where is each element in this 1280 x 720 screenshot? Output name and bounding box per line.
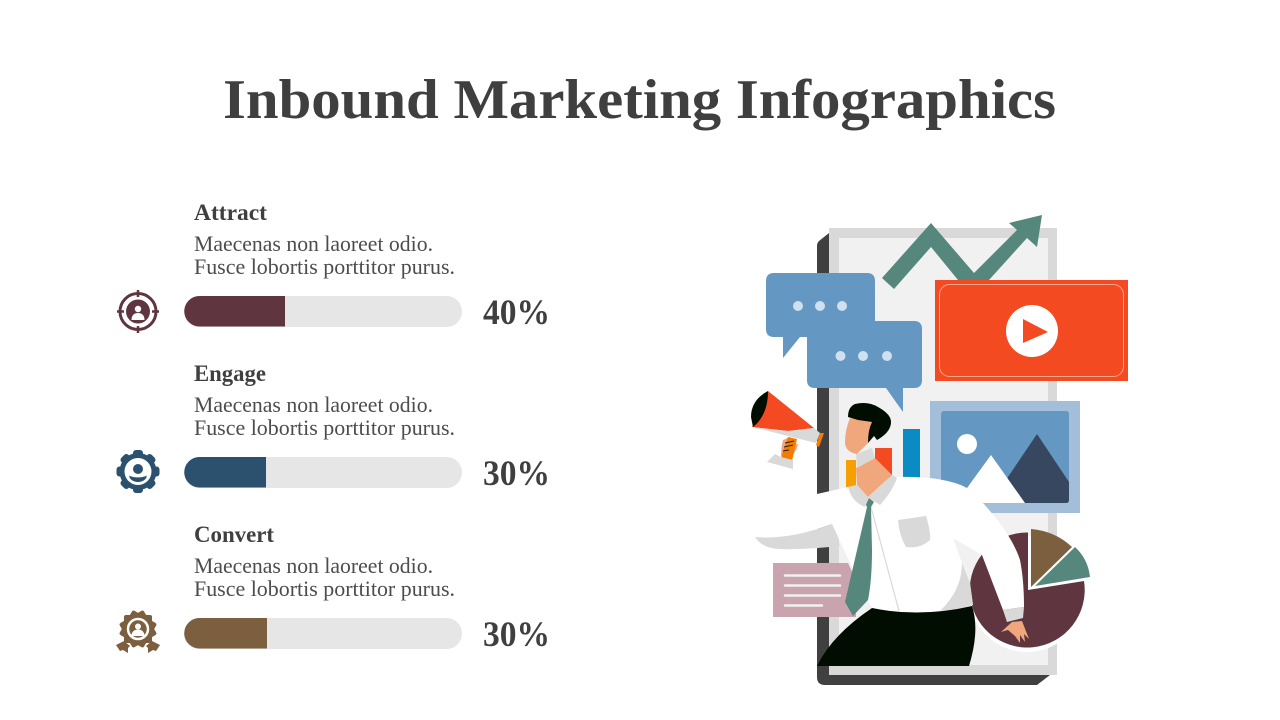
bar chart: [846, 429, 920, 488]
text block: engage: [194, 392, 455, 440]
panel: engage: [116, 361, 550, 493]
video card: [935, 280, 1128, 381]
text block: convert: Maecenas non laoreet odio.: [194, 553, 433, 578]
heading: convert: Convert: [194, 522, 274, 547]
person: [755, 403, 1029, 666]
hand: [1001, 621, 1029, 643]
speech bubble: lower: [807, 321, 922, 412]
text block: attract: Fusce lobortis porttitor purus.: [194, 254, 455, 279]
shirt seam: [871, 507, 899, 611]
panel: convert: [116, 522, 550, 654]
progress bar: 30%: [184, 618, 462, 649]
icon: target person: [117, 290, 159, 333]
neck: [856, 458, 892, 497]
neck band: [856, 448, 875, 468]
icon: gear person: [116, 450, 160, 493]
panel: attract: [117, 200, 550, 333]
tie: [845, 498, 874, 616]
text block: attract: Maecenas non laoreet odio.: [194, 231, 433, 256]
arrow: growth trend: [882, 215, 1042, 289]
picture card: [930, 401, 1080, 513]
illustration: marketer with phone: [751, 215, 1128, 685]
megaphone: [751, 391, 824, 469]
text block: convert: [194, 553, 455, 601]
collar: [848, 475, 897, 507]
hair: [848, 403, 891, 443]
trousers: [817, 606, 975, 666]
value: 40%: 40%: [483, 292, 550, 332]
shirt: [755, 477, 1024, 612]
text block: engage: Fusce lobortis porttitor purus.: [194, 415, 455, 440]
heading: engage: Engage: [194, 361, 266, 386]
note card: [773, 563, 856, 617]
pocket: [898, 516, 930, 547]
phone: [817, 228, 1057, 685]
pie chart: [969, 529, 1090, 652]
finger lines: [783, 441, 794, 451]
megaphone mouth: [751, 391, 768, 427]
progress bar: 40%: [184, 296, 462, 327]
megaphone handle: [781, 437, 797, 461]
face: [845, 418, 872, 454]
value: 30%: 30%: [483, 614, 550, 654]
icon: award rosette: [116, 610, 160, 653]
heading: attract: Attract: [194, 200, 267, 225]
progress bar: 30%: [184, 457, 462, 488]
megaphone base: [767, 454, 793, 469]
text block: engage: Maecenas non laoreet odio.: [194, 392, 433, 417]
value: 30%: 30%: [483, 453, 550, 493]
body shadow: [940, 563, 973, 611]
megaphone hand: [781, 437, 798, 458]
text block: attract: [194, 231, 455, 279]
sleeve shadow: [755, 524, 840, 549]
cuff: [1003, 607, 1024, 622]
text block: convert: Fusce lobortis porttitor purus.: [194, 576, 455, 601]
megaphone horn: [752, 391, 814, 431]
title: Inbound Marketing Infographics: [223, 69, 1056, 131]
speech bubble: upper: [766, 273, 875, 358]
